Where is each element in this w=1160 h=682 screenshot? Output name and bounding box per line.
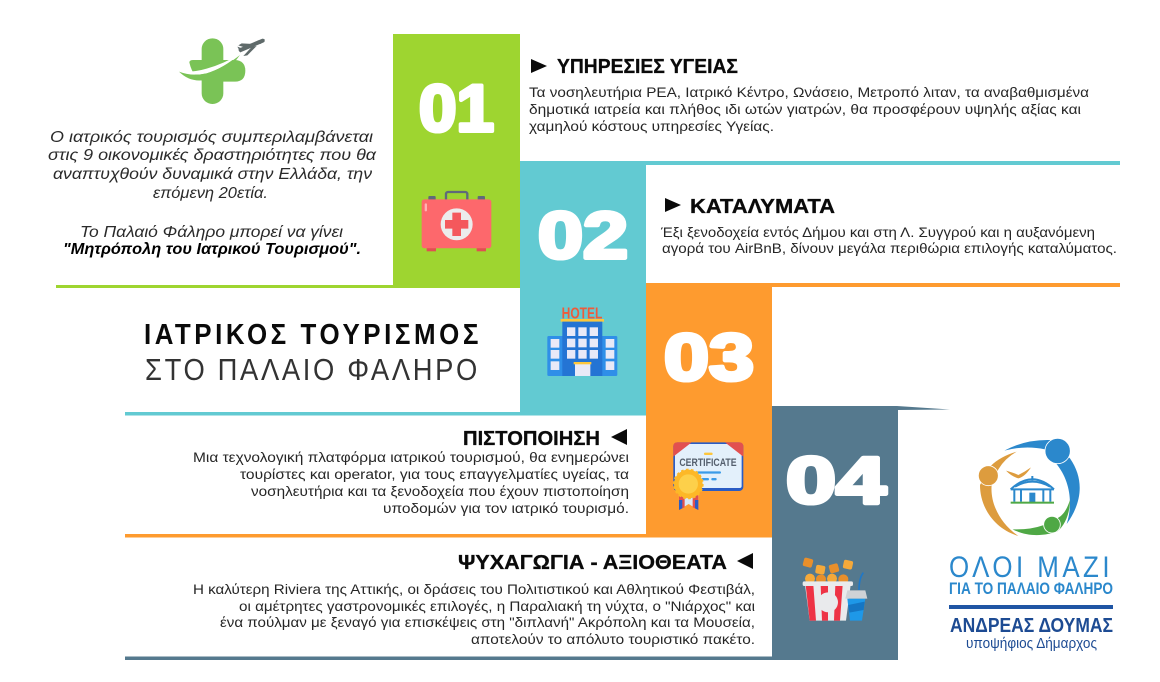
text: intro paragraph: Ο ιατρικός τουρισμός συμπεριλαμβάνεται (50, 129, 373, 146)
text: campaign name: ΑΝΔΡΕΑΣ ΔΟΥΜΑΣ (950, 615, 1113, 637)
text: certification body: υποδομών για τον ιατρικό τουρισμό. (383, 501, 629, 517)
panel: 02 accommodation (660, 196, 1117, 257)
panel: 01 green block (56, 34, 520, 288)
text: health services body: χαμηλού κόστους υπηρεσίες Υγείας. (529, 119, 774, 135)
text: entertainment body: οι αμέτρητες γαστρονομικές επιλογές, η Παραλιακή τη νύχτα, ο "Νιάρχος" και (239, 599, 755, 615)
text: intro paragraph (48, 129, 377, 258)
text: health services body: Τα νοσηλευτήρια ΡΕΑ, Ιατρικό Κέντρο, Ωνάσειο, Μετροπό λιταν, τα αναβαθμισμένα (529, 85, 1089, 101)
text: campaign name: υποψήφιος Δήμαρχος (966, 636, 1097, 652)
text: entertainment body: Η καλύτερη Riviera της Αττικής, οι δράσεις του Πολιτιστικού και Αθλητικού Φεστιβάλ, (193, 582, 755, 598)
text: accommodation body (660, 225, 1117, 257)
number 04: 04 (786, 443, 886, 517)
icon: first aid kit (422, 192, 491, 251)
text: entertainment body: αποτελούν το απόλυτο τουριστικό πακέτο. (471, 632, 755, 648)
text: intro paragraph: "Μητρόπολη του Ιατρικού Τουρισμού". (63, 241, 361, 258)
text: certification body: νοσηλευτήρια και τα ξενοδοχεία που έχουν πιστοποίηση (251, 484, 629, 500)
text: campaign name: ΓΙΑ ΤΟ ΠΑΛΑΙΟ ΦΑΛΗΡΟ (949, 580, 1113, 598)
heading: entertainment: ΨΥΧΑΓΩΓΙΑ - ΑΞΙΟΘΕΑΤΑ (458, 552, 727, 574)
title (144, 319, 482, 387)
text: intro paragraph: στις 9 οικονομικές δραστηριότητες που θα (48, 147, 377, 164)
icon: hotel: HOTEL (562, 305, 602, 322)
heading: certification: ΠΙΣΤΟΠΟΙΗΣΗ (463, 428, 600, 450)
text: campaign name: ΟΛΟΙ ΜΑΖΙ (949, 551, 1113, 584)
text: campaign name (949, 551, 1113, 652)
panel: 03 orange block (125, 283, 1120, 538)
icon: certificate: CERTIFICATE (679, 457, 737, 469)
panel: 02 teal block (125, 161, 1120, 416)
panel: 01 health services (529, 56, 1089, 135)
text: entertainment body (193, 582, 755, 648)
panel: 04 slate block (125, 406, 950, 660)
title: ΙΑΤΡΙΚΟΣ ΤΟΥΡΙΣΜΟΣ (144, 319, 482, 351)
number 03: 03 (664, 320, 754, 394)
panel: 04 entertainment (193, 552, 755, 648)
text: certification body (193, 450, 629, 517)
text: certification body: τουρίστες και operator, για τους επαγγελματίες υγείας, τα (240, 467, 629, 483)
title: ΣΤΟ ΠΑΛΑΙΟ ΦΑΛΗΡΟ (145, 352, 480, 387)
text: health services body (529, 85, 1089, 135)
icon: popcorn and drink (802, 557, 867, 621)
heading: accommodation: ΚΑΤΑΛΥΜΑΤΑ (690, 196, 835, 218)
text: certification body: Μια τεχνολογική πλατφόρμα ιατρικού τουρισμού, θα ενημερώνει (193, 450, 629, 466)
number 01: 01 (419, 71, 494, 145)
heading: health services: ΥΠΗΡΕΣΙΕΣ ΥΓΕΙΑΣ (557, 56, 738, 78)
text: intro paragraph: Το Παλαιό Φάληρο μπορεί να γίνει (80, 224, 343, 241)
icon: medical cross with plane (179, 38, 265, 104)
number 02: 02 (538, 198, 628, 272)
icon: certificate (673, 442, 743, 510)
text: accommodation body: Έξι ξενοδοχεία εντός Δήμου και στη Λ. Συγγρού και η αυξανόμενη (660, 225, 1095, 241)
text: intro paragraph: αναπτυχθούν δυναμικά στην Ελλάδα, την (53, 166, 372, 183)
logo: campaign (949, 438, 1113, 652)
panel: 03 certification (193, 428, 629, 517)
text: intro paragraph: επόμενη 20ετία. (153, 185, 268, 202)
icon: campaign emblem (978, 438, 1080, 536)
text: entertainment body: ένα πούλμαν με ξεναγό για επισκέψεις στη "διπλανή" Ακρόπολη και τα Μουσεία, (220, 615, 755, 631)
icon: hotel (547, 305, 617, 376)
text: accommodation body: αγορά του AirBnB, δίνουν μεγάλα περιθώρια επιλογής καταλύματος. (662, 241, 1117, 257)
panel: intro (48, 38, 377, 258)
text: health services body: δημοτικά ιατρεία και πλήθος ιδι ωτών γιατρών, θα προσφέρουν υψηλής αξίας και (529, 102, 1081, 118)
